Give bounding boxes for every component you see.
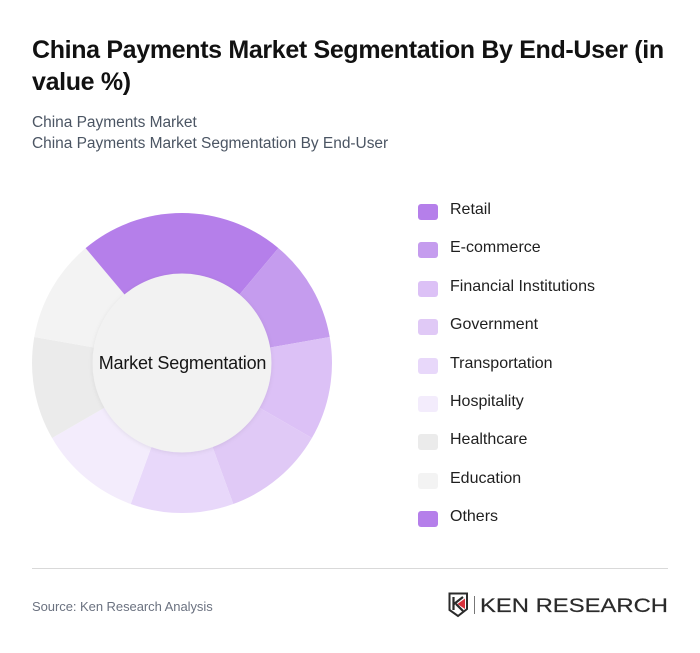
legend xyxy=(418,201,595,527)
legend item: Retail: Retail xyxy=(450,201,491,218)
title: China Payments Market Segmentation By End-User (in xyxy=(32,36,664,64)
logo: Ken Research xyxy=(448,592,668,618)
donut chart xyxy=(32,213,332,513)
title: value %) xyxy=(32,68,131,96)
legend item: Transportation: Transportation xyxy=(450,355,553,372)
donut centre xyxy=(92,274,272,452)
subtitle: China Payments Market xyxy=(32,114,197,131)
source note: Source: Ken Research Analysis xyxy=(32,599,213,614)
legend item: Hospitality xyxy=(418,393,524,412)
legend item: Healthcare: Healthcare xyxy=(450,431,527,448)
legend item: Education: Education xyxy=(450,470,521,487)
legend item: Healthcare xyxy=(418,431,527,450)
legend item: Retail xyxy=(418,201,491,220)
legend item: E-commerce: E-commerce xyxy=(450,239,541,256)
donut centre: Market Segmentation xyxy=(99,353,266,373)
legend item: Transportation xyxy=(418,355,553,374)
subtitle: China Payments Market Segmentation By End-User xyxy=(32,135,388,152)
legend item: E-commerce xyxy=(418,239,541,258)
legend item: Financial Institutions: Financial Institutions xyxy=(450,278,595,295)
legend item: Hospitality: Hospitality xyxy=(450,393,524,410)
legend item: Education xyxy=(418,470,521,489)
legend item: Government: Government xyxy=(450,316,538,333)
legend item: Others: Others xyxy=(450,508,498,525)
legend item: Others xyxy=(418,508,498,527)
title xyxy=(32,36,664,96)
icon: shield xyxy=(450,594,467,616)
logo wordmark: KEN RESEARCH xyxy=(480,595,668,617)
subtitle xyxy=(32,114,388,152)
legend item: Government xyxy=(418,316,538,335)
